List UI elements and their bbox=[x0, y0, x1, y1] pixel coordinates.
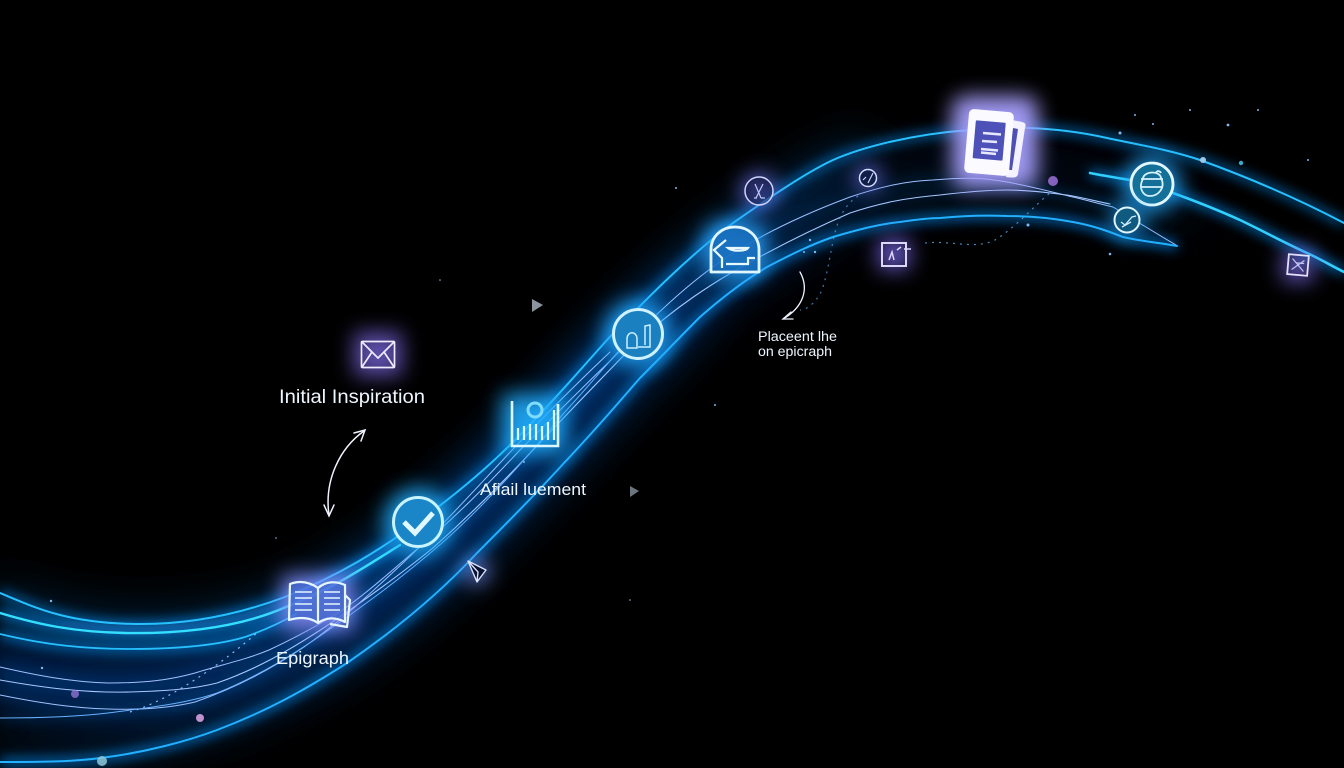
icon: document card bbox=[952, 96, 1038, 188]
icon: small circle top bbox=[854, 164, 882, 192]
glowing pink dots bbox=[71, 176, 1058, 766]
icon: small right ring bbox=[1109, 202, 1145, 238]
label: Afiail luement: Afiail luement bbox=[480, 480, 586, 499]
particles bbox=[41, 109, 1309, 669]
icon: ring with figure bbox=[604, 300, 672, 368]
label: Placeent lhe on epicraph: on epicraph bbox=[758, 344, 832, 359]
icon: rounded head bbox=[702, 220, 768, 280]
icon: chart bbox=[502, 394, 566, 454]
icon: gray triangle upper bbox=[532, 299, 543, 312]
dashed particle trails bbox=[130, 193, 1050, 712]
icon: far-right square bbox=[1282, 250, 1314, 282]
label: Placeent lhe on epicraph bbox=[758, 329, 837, 359]
icon: check circle bbox=[384, 488, 452, 556]
icon: small circle upper left bbox=[740, 172, 778, 210]
icon: large right ring bbox=[1123, 155, 1181, 213]
icon: gray triangle lower bbox=[630, 486, 639, 497]
label: Initial Inspiration: Initial Inspiration bbox=[279, 386, 425, 408]
icon: open book bbox=[282, 575, 354, 631]
icon: square bbox=[878, 238, 911, 270]
arrow: curved two-way bbox=[324, 430, 365, 516]
arrow: to placement label bbox=[783, 272, 804, 319]
icon: paper plane bbox=[462, 557, 490, 585]
label: Epigraph: Epigraph bbox=[276, 648, 349, 668]
band haze bbox=[0, 150, 1180, 762]
label: Placeent lhe on epicraph: Placeent lhe bbox=[758, 329, 837, 344]
icon: envelope bbox=[354, 332, 402, 376]
